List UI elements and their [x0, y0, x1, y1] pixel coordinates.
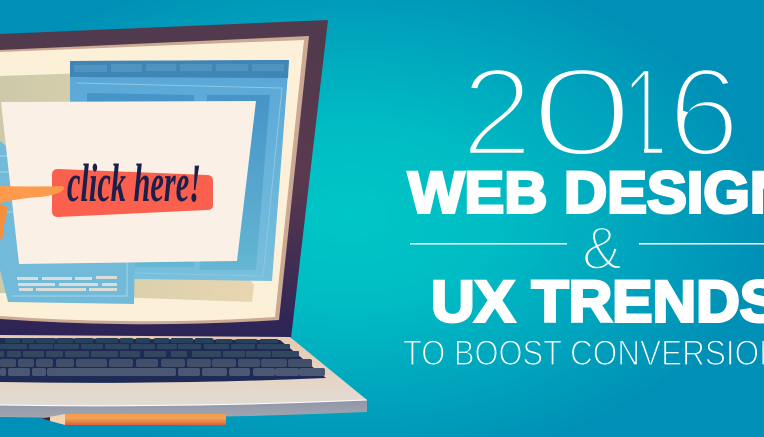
screen bezel edge: [0, 36, 309, 324]
rule right: [639, 243, 764, 244]
subheading: TO BOOST: [403, 334, 562, 373]
keys row 1: [5, 338, 278, 343]
year 2016: 1: [622, 42, 668, 182]
keys row 5: [0, 368, 325, 376]
heading: ux trends: UX TRENDS: [431, 270, 764, 334]
window header bar: [70, 60, 289, 78]
screen: [0, 40, 304, 321]
window inner panels: [87, 93, 194, 267]
year 2016: 6: [668, 42, 740, 182]
blue browser window: [70, 60, 289, 281]
pointing finger: [0, 186, 64, 241]
click here button: click here!: [67, 153, 201, 213]
keys row 2: [0, 344, 290, 349]
subheading: [403, 334, 764, 373]
text lines: [17, 276, 117, 291]
year 2016: [470, 70, 732, 154]
laptop illustration: [0, 20, 367, 425]
laptop base: [0, 335, 367, 418]
keys row 4: [0, 359, 312, 367]
pencil: [41, 414, 226, 425]
title block: [404, 70, 764, 365]
ampersand: &: [582, 215, 622, 282]
deck: [0, 335, 367, 406]
front edge: [0, 400, 367, 418]
year 2016: 0: [530, 42, 634, 182]
small lower-left window: [0, 141, 135, 304]
rule left: [410, 243, 567, 244]
keyboard: [0, 338, 326, 383]
click here button: [52, 153, 213, 217]
paper card: [1, 101, 256, 264]
laptop lid: [0, 20, 328, 338]
beige backdrop panel: [0, 73, 254, 302]
keys row 3: [0, 351, 299, 357]
year 2016: 2: [461, 42, 533, 182]
